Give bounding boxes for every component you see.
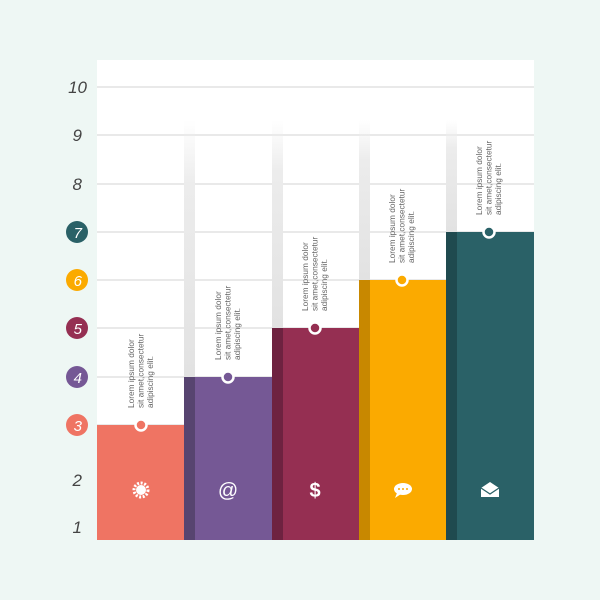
badge 3 (66, 414, 88, 436)
badge 7: 7 (74, 225, 83, 242)
badge 7 (66, 221, 88, 243)
axis labels: 9 (73, 126, 83, 145)
bar 3 (272, 328, 360, 540)
bar 2 (184, 377, 272, 540)
badge 6: 6 (74, 273, 83, 290)
text 1: adipiscing elit. (145, 356, 155, 408)
icon: dollar: $ (309, 480, 321, 502)
text 5: adipiscing elit. (493, 163, 503, 215)
text 4: sit amet,consectetur (396, 189, 406, 263)
icon: chat (394, 483, 412, 498)
text 5: sit amet,consectetur (484, 141, 494, 215)
text 4: Lorem ipsum dolor (387, 194, 397, 263)
bar 5 (446, 232, 534, 540)
axis labels (66, 78, 88, 537)
text 4: adipiscing elit. (406, 211, 416, 263)
text 3: Lorem ipsum dolor (300, 242, 310, 311)
badge 5: 5 (74, 321, 83, 338)
dots (136, 226, 494, 430)
icon: at: @ (218, 480, 238, 502)
badge 4: 4 (74, 370, 82, 387)
text 5: Lorem ipsum dolor (474, 146, 484, 215)
bar 4 (359, 280, 447, 540)
text 2: Lorem ipsum dolor (213, 291, 223, 360)
text 1: Lorem ipsum dolor (126, 339, 136, 408)
badge 4 (66, 366, 88, 388)
axis labels: 1 (73, 518, 82, 537)
bar 1 (97, 425, 185, 540)
axis labels: 2 (72, 471, 83, 490)
text 3: adipiscing elit. (319, 259, 329, 311)
badge 5 (66, 317, 88, 339)
text 1: sit amet,consectetur (136, 334, 146, 408)
text 2: sit amet,consectetur (222, 286, 232, 360)
lorem labels (126, 141, 503, 408)
axis labels: 10 (68, 78, 88, 97)
icon: envelope (481, 482, 499, 497)
axis labels: 8 (73, 175, 83, 194)
text 3: sit amet,consectetur (310, 237, 320, 311)
text 2: adipiscing elit. (232, 308, 242, 360)
badge 6 (66, 269, 88, 291)
chart panel (97, 60, 534, 540)
shadow strips (184, 120, 457, 377)
badge 3: 3 (74, 418, 83, 435)
icon: gear (134, 483, 148, 497)
